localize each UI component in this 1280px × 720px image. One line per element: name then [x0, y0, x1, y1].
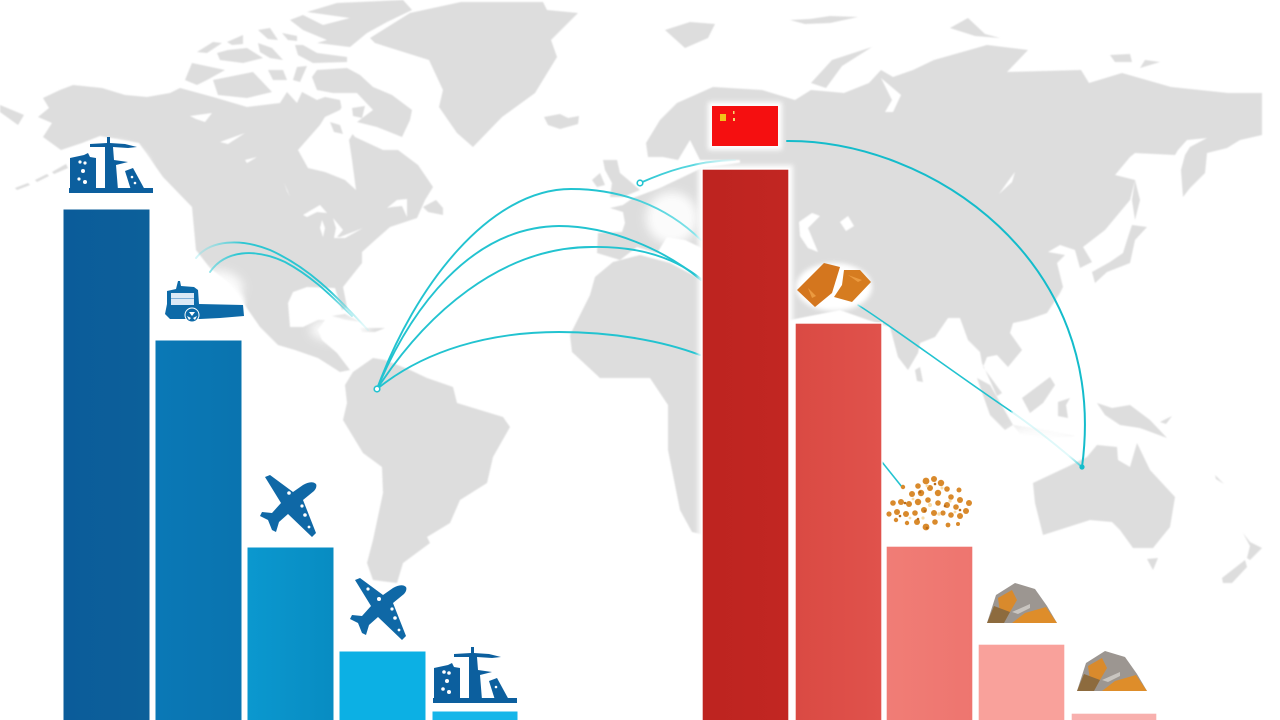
map: Eurasia: [702, 45, 1262, 396]
bar 2 blue: [155, 340, 242, 720]
map: Canadian lakes: [190, 113, 290, 197]
map: Ireland: [592, 173, 605, 187]
arc: gold bars to Southeast Asia: [858, 305, 1012, 412]
map: Java: [1013, 425, 1075, 438]
arc: China to Australia: [787, 141, 1085, 467]
map: Greenland: [370, 2, 578, 147]
bar chart: imports (red): [702, 169, 1157, 720]
map: Sri Lanka: [915, 367, 923, 382]
map: North America: [38, 85, 433, 372]
bar 4 blue: [339, 651, 426, 720]
arc: Mexico lower route: [210, 253, 352, 316]
map: Scandinavia: [646, 87, 795, 160]
map: Devon Island: [295, 45, 347, 63]
icon: ship: [161, 281, 245, 325]
map: Sakhalin: [1132, 180, 1140, 220]
map: Victoria Island: [213, 72, 272, 98]
bar 2 red: [795, 323, 882, 720]
map: South America: [343, 358, 510, 583]
arc: South America to Africa: [377, 332, 700, 389]
icon: China flag: [708, 102, 782, 150]
map: New Zealand: [1215, 475, 1262, 583]
map: Newfoundland: [423, 200, 443, 215]
bar 3 red: [886, 546, 973, 720]
arc: South America to Mediterranean: [377, 247, 701, 389]
icon: airplane lower: [350, 578, 406, 640]
map: Cuba: [332, 314, 385, 332]
map: Japan: [1092, 225, 1147, 283]
icon: gold bars: [796, 263, 872, 311]
map: Sumatra: [977, 378, 1013, 430]
arc: Southeast Asia to Australia: [1012, 412, 1082, 467]
icon: industrial plant small: [433, 647, 517, 703]
map: Queen Elizabeth Islands: [197, 28, 307, 82]
soft white map halos: [187, 192, 1075, 655]
map: Papua New Guinea: [1097, 403, 1172, 438]
icon: airplane upper: [260, 475, 316, 537]
map: Great Lakes: [303, 199, 407, 238]
arc: Mexico upper route: [196, 242, 368, 330]
destination node: Australia: [1079, 464, 1085, 470]
map: Australia: [1033, 443, 1175, 548]
map: Iceland: [544, 114, 579, 129]
origin node: South America: [374, 386, 380, 392]
bar 1 red: [702, 169, 789, 720]
bar chart: exports (blue): [63, 209, 518, 720]
map: Ellesmere Island: [290, 0, 412, 47]
map: Novaya Zemlya: [811, 47, 872, 88]
icon: gold nuggets: [886, 476, 972, 530]
map: Hudson Bay: [298, 100, 362, 190]
arc: Europe connector: [640, 160, 735, 183]
arc: South America to Europe top: [377, 189, 701, 389]
red bars halo: [698, 165, 793, 720]
map: Chukotka fragment: [0, 105, 24, 125]
icon: ore rock lower: [1077, 651, 1147, 691]
arc: South America to Europe middle: [377, 226, 701, 389]
map: Baffin Island: [312, 68, 412, 137]
map: Caspian, Aral and Baikal: [799, 78, 1015, 252]
map: Arctic archipelagos: [665, 16, 1160, 68]
icon: ore rock upper: [987, 583, 1057, 623]
map: Tasmania: [1147, 558, 1158, 570]
origin node: Europe: [637, 180, 643, 186]
trade arcs: [196, 141, 1085, 487]
arc: bar to gold nuggets: [882, 462, 902, 487]
bar 1 blue: [63, 209, 150, 720]
map: Southampton Island: [330, 106, 365, 134]
icon: industrial plant large: [66, 137, 156, 207]
map: Africa: [570, 255, 760, 535]
bar 5 blue: [432, 711, 518, 720]
map: Borneo: [1022, 377, 1055, 413]
map: Aleutian chain: [15, 164, 68, 190]
map: Banks Island: [185, 63, 225, 85]
map: Europe: [597, 160, 760, 260]
world map: [0, 0, 1262, 583]
map: Britain: [603, 160, 640, 197]
bar 3 blue: [247, 547, 334, 720]
bar 4 red: [978, 644, 1065, 720]
bar 5 red: [1071, 713, 1157, 720]
map: Sulawesi: [1058, 398, 1070, 418]
